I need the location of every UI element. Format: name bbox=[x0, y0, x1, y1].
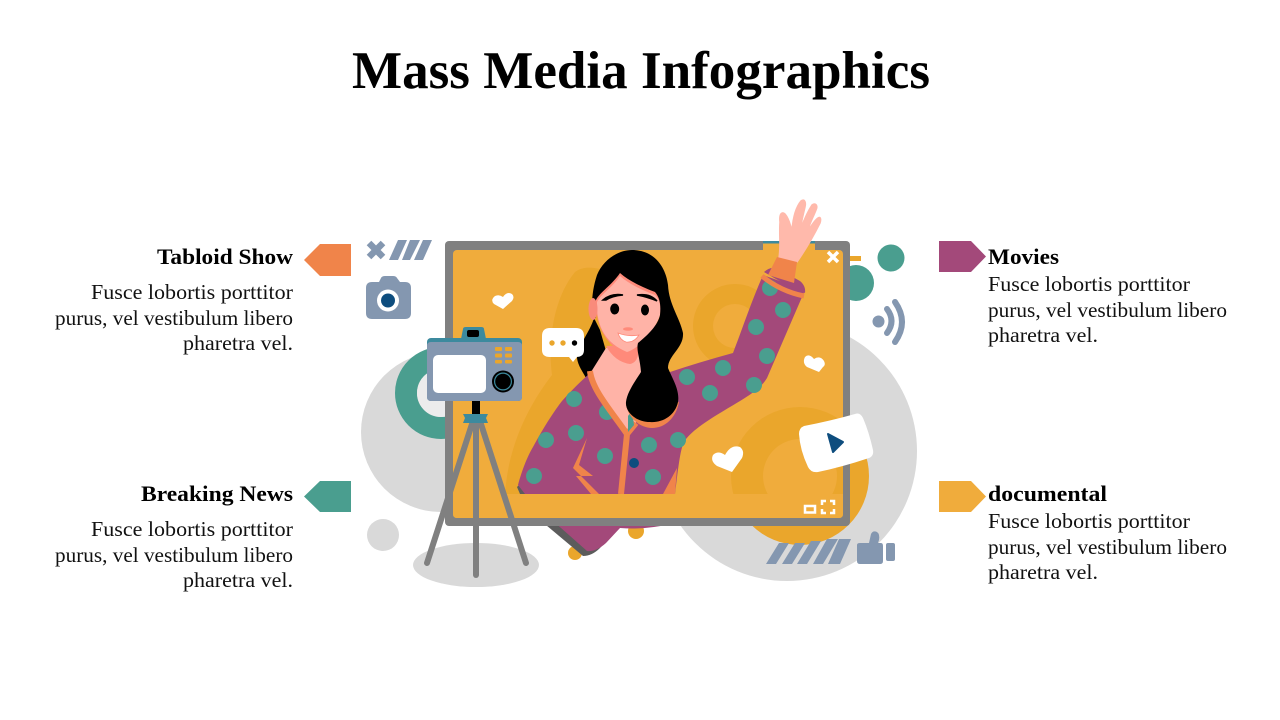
pocket bbox=[573, 438, 599, 494]
text block: documental description: purus, vel vestibulum libero bbox=[988, 535, 1227, 559]
text block: documental description: pharetra vel. bbox=[988, 560, 1098, 584]
panel: Movies bbox=[939, 241, 1227, 347]
arrow tag: orange bbox=[304, 244, 351, 276]
eyebrows bbox=[603, 295, 657, 301]
text block: documental description bbox=[988, 509, 1227, 584]
heading: documental: documental bbox=[988, 481, 1107, 506]
text block: Breaking News description: pharetra vel. bbox=[183, 568, 293, 592]
panel: Breaking News bbox=[55, 481, 351, 592]
text block: Movies description: pharetra vel. bbox=[988, 323, 1098, 347]
text block: Tabloid Show description bbox=[55, 280, 293, 355]
neck and chest bbox=[592, 348, 641, 429]
play card bbox=[799, 414, 873, 472]
heading: Movies: Movies bbox=[988, 244, 1059, 269]
neck shadow bbox=[606, 345, 638, 364]
title: Mass Media Infographics bbox=[352, 42, 930, 100]
cuff bbox=[762, 257, 805, 296]
woman lower body under frame bbox=[540, 520, 680, 560]
nose bbox=[623, 327, 633, 331]
icon: photo camera bbox=[366, 276, 411, 319]
button bbox=[629, 458, 639, 468]
text block: Movies description bbox=[988, 272, 1227, 347]
arrow tag: magenta bbox=[939, 241, 986, 272]
icon: thumbs up bbox=[857, 531, 895, 564]
text block: Breaking News description bbox=[55, 517, 293, 592]
text block: Movies description: purus, vel vestibulum libero bbox=[988, 298, 1227, 322]
tripod bbox=[427, 421, 526, 575]
icon: stripes bottom bbox=[766, 539, 851, 564]
screen background shapes bbox=[506, 268, 843, 494]
panel: Tabloid Show bbox=[55, 244, 351, 355]
icon: hearts bbox=[492, 293, 825, 472]
mouth bbox=[618, 333, 639, 342]
text block: Tabloid Show description: Fusce lobortis porttitor bbox=[91, 280, 293, 304]
eyes bbox=[610, 304, 619, 314]
collar bbox=[590, 371, 636, 494]
icon: stripes top bbox=[389, 240, 432, 260]
panel: documental bbox=[939, 481, 1227, 584]
face bbox=[596, 271, 661, 355]
central illustration bbox=[361, 200, 917, 587]
background shapes bbox=[361, 244, 917, 587]
jacket dots bbox=[526, 280, 791, 485]
icon: cross bbox=[369, 243, 383, 257]
woman bbox=[517, 200, 821, 494]
screen band bbox=[453, 494, 843, 518]
torso and arm bbox=[517, 275, 805, 494]
video frame bbox=[445, 241, 850, 526]
window controls bbox=[805, 252, 838, 513]
text block: Breaking News description: Fusce lobortis porttitor bbox=[91, 517, 293, 541]
heading: Tabloid Show: Tabloid Show bbox=[157, 244, 293, 269]
text block: Tabloid Show description: pharetra vel. bbox=[183, 331, 293, 355]
text block: documental description: Fusce lobortis porttitor bbox=[988, 509, 1190, 533]
hair bbox=[592, 250, 683, 428]
speech bubble bbox=[542, 328, 584, 362]
heading: Breaking News: Breaking News bbox=[141, 481, 293, 506]
text block: Breaking News description: purus, vel vestibulum libero bbox=[55, 543, 293, 567]
icon: sound waves bbox=[872, 302, 902, 342]
ear bbox=[588, 298, 598, 320]
arrow tag: yellow bbox=[939, 481, 986, 512]
text block: Movies description: Fusce lobortis porttitor bbox=[988, 272, 1190, 296]
hand bbox=[779, 200, 821, 262]
video camera bbox=[427, 327, 522, 423]
arrow tag: teal bbox=[304, 481, 351, 512]
text block: Tabloid Show description: purus, vel vestibulum libero bbox=[55, 306, 293, 330]
